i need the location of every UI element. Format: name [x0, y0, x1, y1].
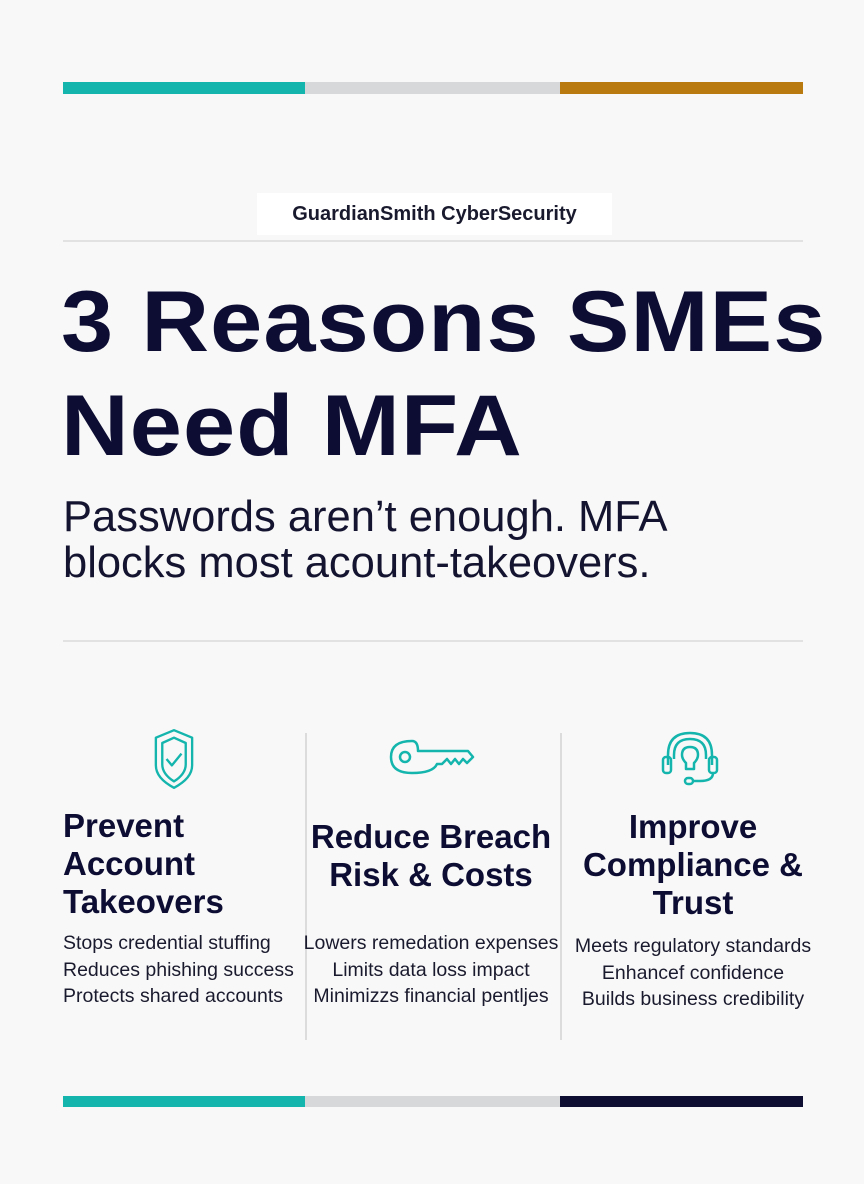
heading: Risk & Costs [329, 856, 533, 893]
column 3: improve compliance [575, 732, 811, 1010]
bullets: Reduces phishing success [63, 958, 294, 980]
top color bar [63, 82, 803, 94]
subtitle [63, 493, 668, 587]
icon: key [390, 740, 474, 774]
subtitle: Passwords aren’t enough. MFA [63, 493, 667, 541]
icon: headset bulb [662, 732, 718, 786]
heading [583, 808, 803, 921]
title: 3 Reasons SMEs [61, 274, 827, 370]
column 2: reduce breach risk [304, 740, 558, 1007]
bullets: Protects shared accounts [63, 985, 283, 1007]
heading [311, 818, 551, 893]
bullets [575, 935, 811, 1010]
heading [63, 807, 224, 920]
bullets: Stops credential stuffing [63, 932, 271, 954]
icon: shield [154, 729, 194, 789]
heading: Improve [629, 808, 757, 845]
brand label [257, 193, 612, 235]
bullets: Builds business credibility [582, 988, 804, 1010]
heading: Prevent [63, 807, 184, 844]
title: Need MFA [61, 378, 523, 474]
bullets: Lowers remedation expenses [304, 932, 558, 954]
bullets: Meets regulatory standards [575, 935, 811, 957]
heading: Compliance & [583, 846, 803, 883]
heading: Takeovers [63, 883, 224, 920]
bullets: Enhancef confidence [602, 962, 784, 984]
bottom color bar [63, 1096, 803, 1107]
heading: Reduce Breach [311, 818, 551, 855]
column 1: prevent account takeovers [63, 729, 294, 1007]
subtitle: blocks most acount-takeovers. [63, 539, 651, 587]
heading: Trust [653, 884, 733, 921]
heading: Account [63, 845, 195, 882]
bullets: Minimizzs financial pentljes [313, 985, 549, 1007]
brand label: GuardianSmith CyberSecurity [292, 203, 577, 225]
bullets: Limits data loss impact [332, 958, 530, 980]
title [61, 274, 827, 474]
bullets [304, 932, 558, 1007]
bullets [63, 932, 294, 1007]
